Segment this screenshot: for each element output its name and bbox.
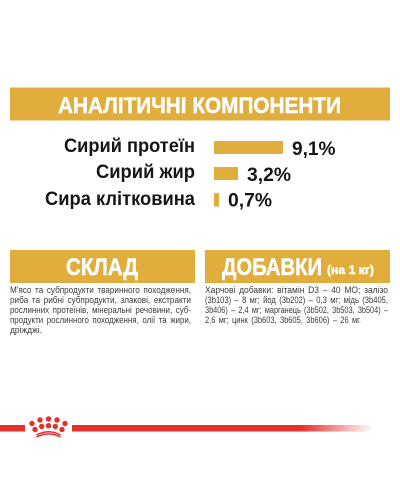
row: crude fibre: Сира клітковина (45, 189, 195, 210)
heading: composition (10, 250, 195, 283)
row: crude fat: Сирий жир (96, 162, 195, 183)
heading: composition: СКЛАД (66, 254, 138, 281)
footer line right (72, 425, 373, 432)
bar chart: analytical components (45, 136, 336, 212)
icon: royal crown logo (29, 416, 68, 437)
text block: composition: рослинних протеїнів, мінеральні речовини, суб- (10, 305, 191, 315)
row: crude protein (64, 136, 336, 160)
text block: additives: 2,6 мг; цинк (3b603, 3b605, 3b606) – 26 мг. (205, 315, 361, 325)
heading: additives (205, 250, 390, 283)
row: crude fibre (45, 189, 272, 212)
heading: additives: ДОБАВКИ (222, 254, 322, 281)
row: crude fat (96, 162, 291, 186)
row: crude fat: 3,2% (247, 164, 291, 186)
footer line left (0, 425, 25, 432)
panel: analytical components header (10, 88, 390, 120)
panel: composition (10, 250, 195, 335)
row: crude fibre: 0,7% (228, 190, 272, 212)
text block: additives: Харчові добавки: вітамін D3 – 40 МО; залізо (205, 285, 388, 295)
row: crude protein: Сирий протеїн (64, 136, 195, 157)
text block: composition: дріжджі. (10, 325, 42, 335)
heading: additives: (на 1 кг) (327, 265, 374, 277)
panel: additives (205, 250, 392, 325)
row: crude protein: 9,1% (292, 138, 336, 160)
text block: composition: риба та рибні субпродукти, злакові, екстракти (10, 295, 191, 305)
title: АНАЛІТИЧНІ КОМПОНЕНТИ (58, 93, 341, 118)
text block: composition: продукти рослинного походження, олії та жири, (10, 315, 191, 325)
text block: composition: М'ясо та субпродукти тваринного походження, (10, 285, 191, 295)
